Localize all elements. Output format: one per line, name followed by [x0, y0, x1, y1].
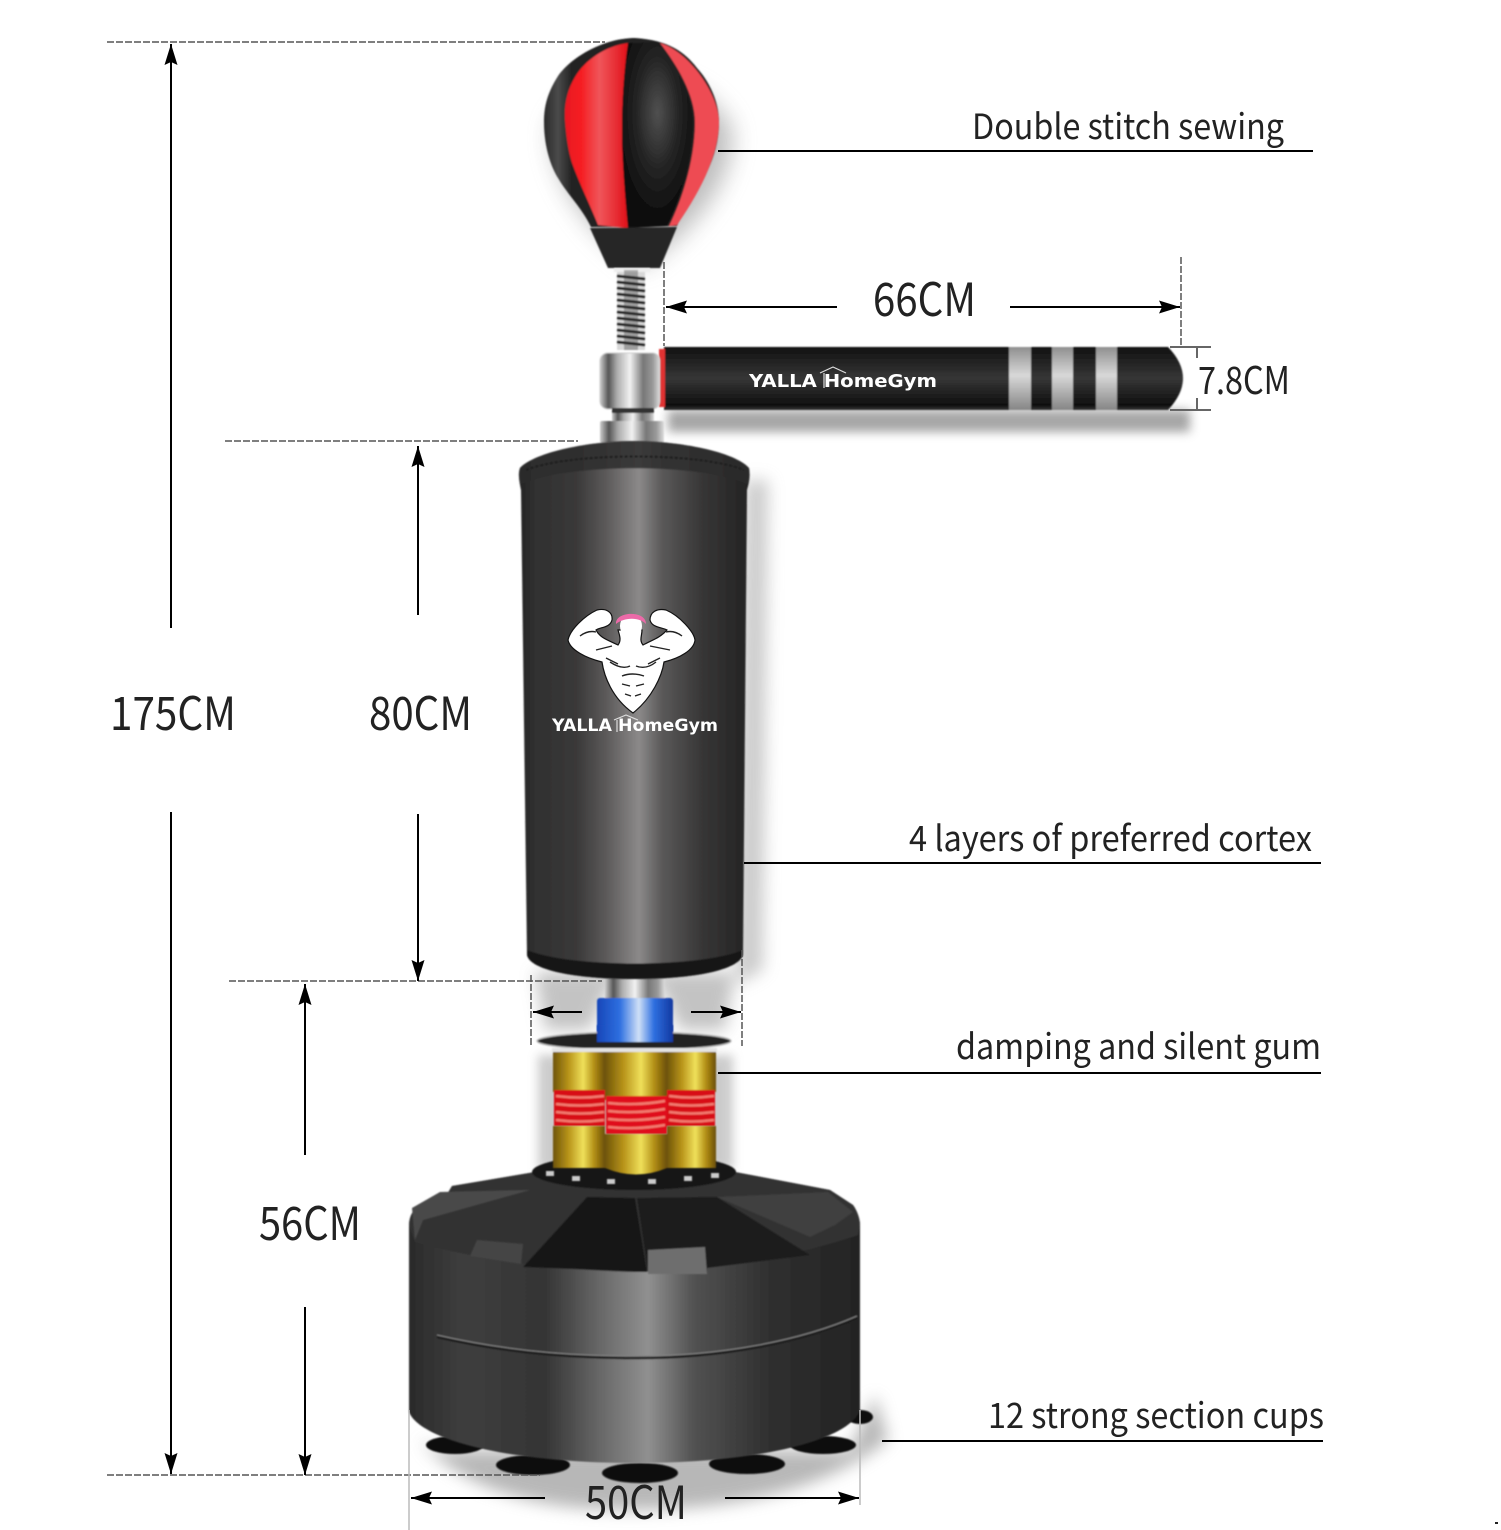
ball — [544, 38, 719, 227]
bar body — [664, 347, 1183, 410]
bag shadow — [735, 480, 768, 985]
spring plate and gold springs — [537, 1025, 733, 1170]
bag bottom dark — [527, 950, 743, 979]
ball collar — [590, 227, 677, 268]
base — [409, 1154, 860, 1463]
dimension: 80CM: 80CM — [369, 678, 472, 744]
shaft and damping section — [535, 972, 735, 1042]
bar shadow — [668, 410, 1190, 432]
logo pink headband — [616, 614, 646, 624]
red spring centre — [606, 1096, 667, 1134]
chrome shaft — [605, 978, 665, 1002]
logo muscle detail — [580, 632, 682, 696]
bag top cap — [519, 441, 750, 484]
dimension: 56CM: 56CM — [259, 1188, 361, 1254]
bag logo: muscle figure — [568, 609, 695, 713]
base notch — [648, 1247, 707, 1274]
collar bolts — [546, 1171, 719, 1184]
ball red panel left — [565, 43, 628, 228]
dimension: 7.8CM — [1170, 347, 1290, 410]
ball red panel right — [660, 43, 719, 226]
base left fin — [412, 1190, 530, 1240]
suction cups — [426, 1410, 873, 1483]
shaft shadow — [535, 972, 735, 1030]
dimension: bag diameter arrows — [531, 950, 742, 1046]
bag stitching — [526, 456, 744, 470]
blue ring — [597, 998, 673, 1042]
damper shadow — [538, 1055, 733, 1170]
base collar — [532, 1154, 736, 1190]
bar stripes — [1009, 347, 1117, 410]
bag logo roof — [614, 715, 638, 732]
chrome joint — [600, 353, 664, 443]
callout: damping gum: damping and silent gum — [956, 1019, 1321, 1070]
base right fin — [717, 1192, 853, 1237]
callout: double stitch sewing: Double stitch sewing — [972, 99, 1284, 150]
gold cylinder left — [553, 1052, 605, 1092]
callout: cortex layers: 4 layers of preferred cortex — [909, 811, 1312, 862]
corner speck — [1495, 1522, 1498, 1524]
gold cylinder centre — [605, 1052, 667, 1100]
red spring left — [554, 1090, 605, 1126]
dimension: 175CM: 175CM — [110, 678, 236, 744]
bag logo — [551, 609, 718, 736]
horizontal bar with shadow — [659, 347, 1190, 432]
base body — [409, 1172, 860, 1463]
top plate — [537, 1032, 731, 1050]
speed ball assembly — [544, 38, 732, 268]
base left shoulder — [470, 1240, 523, 1264]
ball black centre panel — [622, 42, 693, 228]
punching bag cylinder — [519, 441, 750, 979]
dimension: 66CM: 66CM — [873, 264, 976, 330]
dimension: 50CM — [409, 1410, 860, 1530]
base shadow — [420, 1395, 888, 1510]
red end ring — [659, 349, 665, 407]
base dark panel 2 — [637, 1197, 810, 1272]
spring — [614, 268, 650, 350]
gold cylinder right — [667, 1052, 716, 1092]
base seam — [437, 1318, 857, 1358]
dimension: 7.8CM: 7.8CM — [1198, 350, 1290, 405]
lower gold cylinders — [553, 1126, 716, 1174]
callout: suction cups: 12 strong section cups — [988, 1388, 1324, 1439]
red spring right — [667, 1090, 715, 1126]
bag logo text: YALLA HomeGym — [551, 716, 718, 736]
base top dark area — [409, 1172, 860, 1272]
bar logo roof — [820, 367, 846, 388]
base dark panel 1 — [523, 1197, 647, 1272]
ball shadow — [552, 78, 732, 268]
bar logo text: YALLA HomeGym — [748, 371, 937, 392]
